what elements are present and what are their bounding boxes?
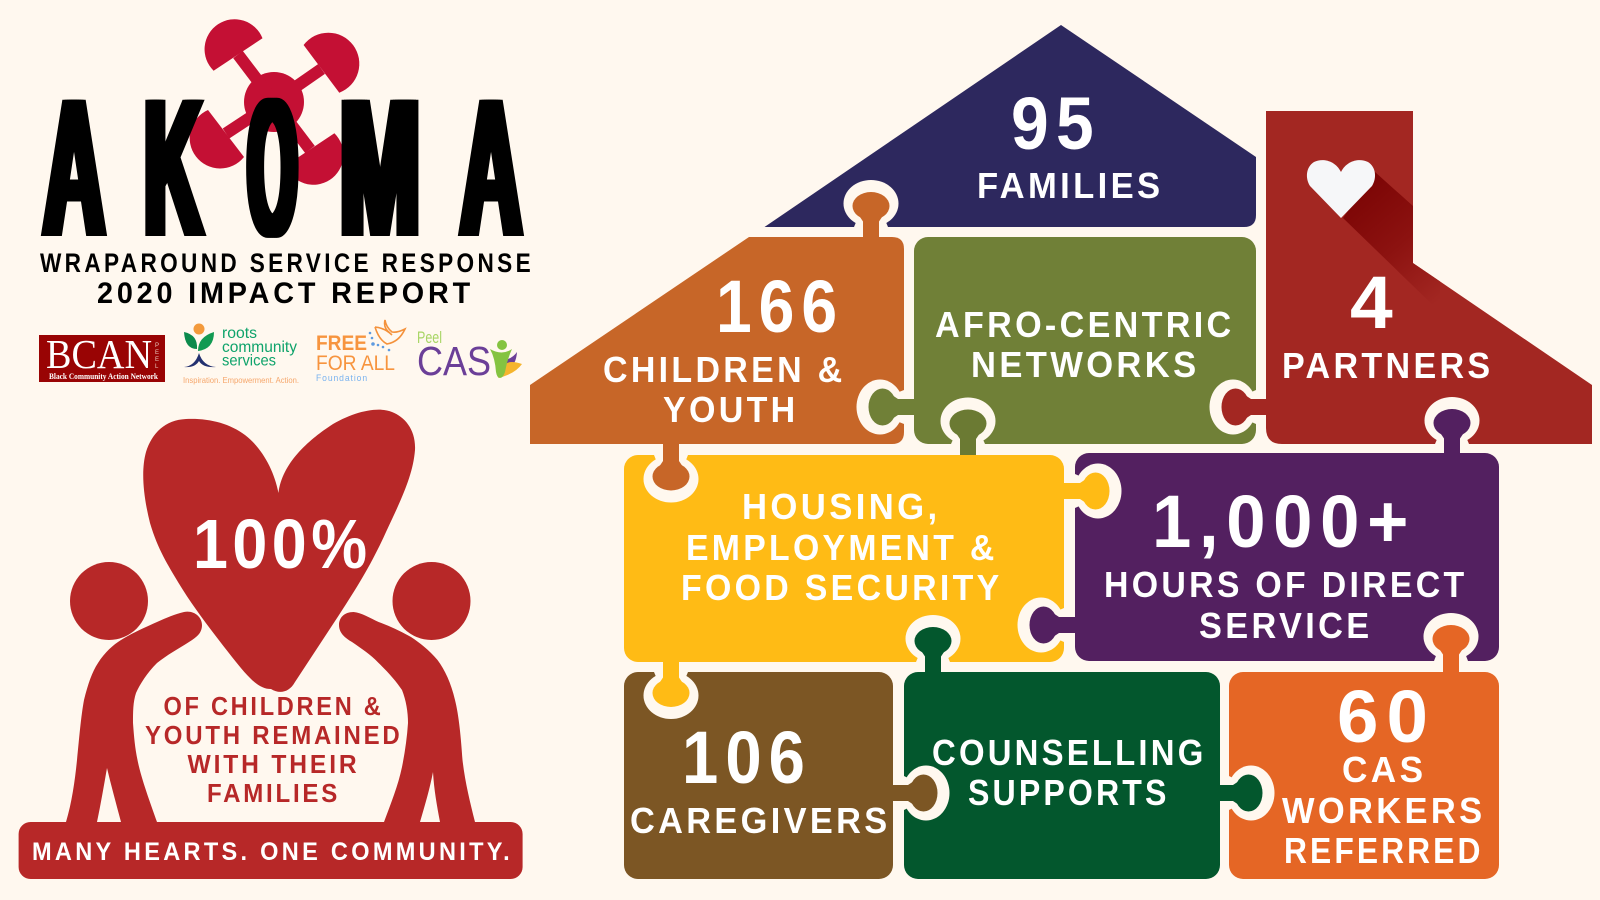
text: 4 partners: PARTNERS bbox=[1282, 345, 1494, 386]
text: housing employment and food security: EMPLOYMENT & bbox=[686, 527, 998, 568]
logo: BCAN Peel: L bbox=[155, 364, 159, 370]
piece: partners chimney bbox=[1266, 111, 1592, 444]
text: 60 CAS workers referred: WORKERS bbox=[1282, 790, 1486, 831]
icon: left figure bbox=[66, 562, 202, 822]
text: 95 families: FAMILIES bbox=[977, 165, 1164, 206]
text: counselling supports bbox=[932, 732, 1206, 813]
text: of children and youth remained with their families: OF CHILDREN & bbox=[164, 691, 384, 721]
panel: 100% heart and figures bbox=[19, 410, 523, 879]
logo: BCAN Peel: E bbox=[155, 350, 159, 356]
title: AKOMA bbox=[40, 57, 524, 278]
text: counselling supports: SUPPORTS bbox=[968, 772, 1170, 813]
piece: children and youth bbox=[530, 237, 904, 444]
text: 166 children and youth bbox=[603, 265, 846, 430]
logo: Peel CAS: Peel bbox=[417, 328, 442, 347]
logo: BCAN Peel: E bbox=[155, 357, 159, 363]
logo: Free For All Foundation bbox=[316, 320, 405, 384]
logo: BCAN Peel: BCAN bbox=[46, 331, 152, 377]
piece: CAS workers referred bbox=[1229, 672, 1499, 879]
text: of children and youth remained with their families: YOUTH REMAINED bbox=[145, 720, 402, 750]
logos row bbox=[39, 320, 522, 385]
text: 95 families: 95 bbox=[1011, 82, 1101, 165]
banner: many hearts one community: MANY HEARTS. ONE COMMUNITY. bbox=[32, 838, 513, 866]
text: 1,000+ hours of direct service: HOURS OF DIRECT bbox=[1104, 564, 1468, 605]
logo: roots community services: services bbox=[222, 352, 276, 370]
text: 1,000+ hours of direct service bbox=[1104, 480, 1468, 646]
stat: 100%: 100% bbox=[193, 505, 372, 583]
text: 60 CAS workers referred: 60 bbox=[1337, 675, 1436, 758]
logo: roots community services bbox=[183, 324, 299, 385]
piece: caregivers bbox=[624, 672, 893, 879]
text: 60 CAS workers referred bbox=[1282, 675, 1486, 871]
text: 1,000+ hours of direct service: 1,000+ bbox=[1152, 480, 1416, 563]
piece: housing employment food security bbox=[624, 455, 1064, 662]
logo: BCAN Peel: Black Community Action Network bbox=[49, 372, 158, 381]
logo: Peel CAS bbox=[417, 328, 522, 384]
subtitle: 2020 IMPACT REPORT bbox=[97, 277, 474, 310]
text: 106 caregivers: CAREGIVERS bbox=[630, 800, 890, 841]
text: housing employment and food security: FOOD SECURITY bbox=[681, 567, 1002, 608]
title: AKOMA: M bbox=[340, 57, 420, 278]
text: 95 families bbox=[977, 82, 1164, 206]
logo: Peel CAS: CAS bbox=[417, 338, 491, 384]
text: 106 caregivers bbox=[630, 716, 890, 841]
title: AKOMA: A bbox=[460, 57, 522, 278]
title: AKOMA: O bbox=[248, 57, 297, 278]
text: 4 partners: 4 bbox=[1350, 261, 1401, 344]
text: 106 caregivers: 106 bbox=[682, 716, 812, 799]
logo: Free For All Foundation: FOR ALL bbox=[316, 352, 395, 375]
title: AKOMA: K bbox=[144, 57, 203, 278]
logo: BCAN Peel: P bbox=[155, 343, 159, 349]
logo: Free For All Foundation: FREE bbox=[316, 332, 367, 355]
icon: right figure bbox=[339, 562, 475, 822]
piece: afro-centric networks bbox=[914, 237, 1256, 444]
text: afro-centric networks: AFRO-CENTRIC bbox=[935, 304, 1234, 345]
text: 60 CAS workers referred: REFERRED bbox=[1284, 830, 1484, 871]
text: 60 CAS workers referred: CAS bbox=[1342, 749, 1426, 790]
subtitle: WRAPAROUND SERVICE RESPONSE bbox=[40, 248, 534, 278]
logo: roots community services: Inspiration. Empowerment. Action. bbox=[183, 376, 299, 385]
banner: many hearts one community bbox=[19, 822, 523, 879]
piece: counselling supports bbox=[904, 672, 1220, 879]
piece: hours of direct service bbox=[1075, 453, 1499, 661]
title: AKOMA: A bbox=[43, 57, 105, 278]
text: afro-centric networks bbox=[935, 304, 1234, 385]
panel: puzzle house bbox=[530, 25, 1592, 879]
puzzle connectors bbox=[644, 180, 1480, 820]
logo: roots community services: community bbox=[222, 339, 297, 356]
text: 166 children and youth: YOUTH bbox=[663, 389, 798, 430]
text: afro-centric networks: NETWORKS bbox=[971, 344, 1200, 385]
piece: 95 families roof bbox=[764, 25, 1256, 227]
text: of children and youth remained with their families: WITH THEIR bbox=[188, 749, 360, 779]
subtitle bbox=[40, 248, 534, 310]
text: housing employment and food security: HOUSING, bbox=[742, 486, 940, 527]
logo: Free For All Foundation: Foundation bbox=[316, 373, 368, 384]
text: of children and youth remained with their families bbox=[145, 691, 402, 808]
logo: roots community services: roots bbox=[222, 325, 257, 342]
text: housing employment and food security bbox=[681, 486, 1002, 608]
icon: large heart bbox=[143, 410, 415, 692]
text: counselling supports: COUNSELLING bbox=[932, 732, 1206, 773]
text: 166 children and youth: 166 bbox=[716, 265, 844, 348]
text: of children and youth remained with their families: FAMILIES bbox=[207, 778, 340, 808]
text: 166 children and youth: CHILDREN & bbox=[603, 349, 846, 390]
text: 4 partners bbox=[1282, 261, 1494, 386]
text: 1,000+ hours of direct service: SERVICE bbox=[1199, 605, 1372, 646]
